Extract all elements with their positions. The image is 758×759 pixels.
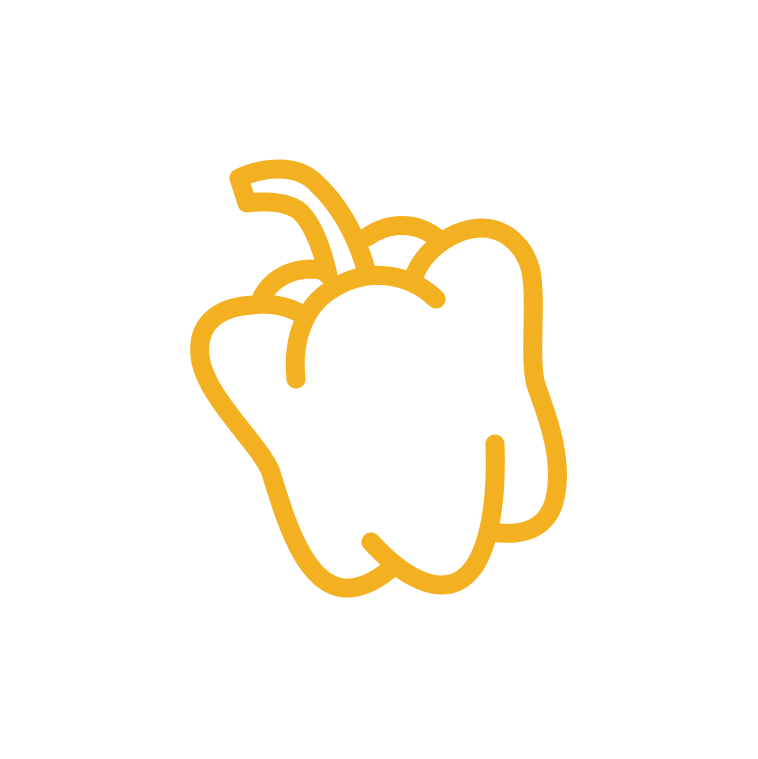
icon: centre lobe top	[295, 275, 436, 379]
icon: left rear lobe	[262, 269, 325, 297]
icon: right lobe	[415, 228, 557, 533]
icon: pepper stem	[239, 169, 367, 275]
icon: bottom centre lobe	[371, 444, 495, 585]
icon: top rear lobe	[367, 226, 437, 238]
icon: left lobe	[200, 304, 389, 588]
